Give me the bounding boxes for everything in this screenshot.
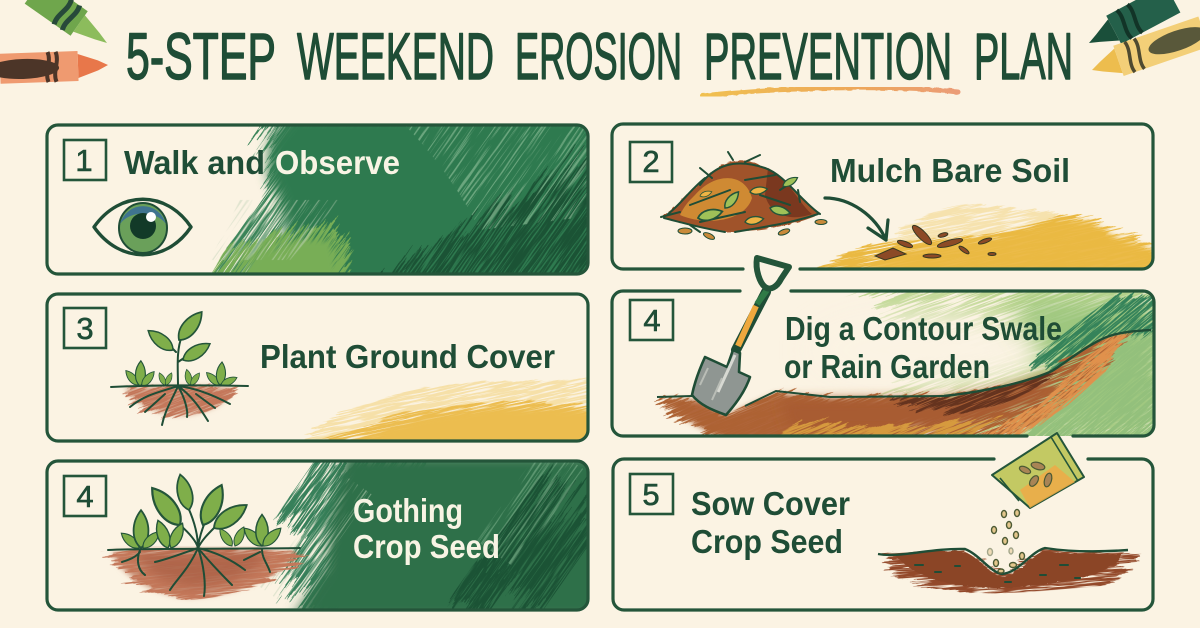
heading: sow cover crop seed: Crop Seed bbox=[691, 523, 843, 560]
title: PLAN bbox=[974, 19, 1073, 93]
heading: gothing crop seed: Crop Seed bbox=[353, 528, 500, 565]
number badge 1 bbox=[64, 140, 106, 180]
heading: walk and observe bbox=[124, 144, 400, 181]
title underline stroke bbox=[703, 88, 958, 96]
title bbox=[126, 19, 1073, 93]
number badge 5 bbox=[630, 474, 673, 514]
icon: yellow crayon bbox=[1087, 16, 1200, 85]
number badge 2 bbox=[630, 142, 672, 182]
panel: step 3 plant ground cover bbox=[45, 292, 590, 443]
panel: step 4 dig a contour swale bbox=[610, 255, 1156, 510]
number badge 4: 4 bbox=[76, 479, 94, 514]
icon: seedling with roots bbox=[111, 307, 248, 454]
number badge 3 bbox=[64, 308, 106, 348]
title: PREVENTION bbox=[704, 19, 952, 93]
heading: walk and observe: Observe bbox=[275, 144, 400, 181]
heading: dig a contour swale or rain garden: or Rain Garden bbox=[784, 348, 990, 385]
number badge 3: 3 bbox=[76, 311, 94, 346]
heading: mulch bare soil: Mulch Bare Soil bbox=[830, 152, 1070, 189]
heading: dig a contour swale or rain garden bbox=[784, 310, 1062, 385]
heading: dig a contour swale or rain garden: Dig a Contour Swale bbox=[785, 310, 1062, 347]
number badge 2: 2 bbox=[642, 144, 660, 179]
title: 5-STEP bbox=[126, 19, 276, 93]
icon: dark green crayon bbox=[1081, 0, 1180, 57]
icon: green crayon bbox=[25, 0, 116, 55]
panel: step 5 sow cover crop seed bbox=[611, 432, 1155, 612]
panel: step 1 walk and observe bbox=[45, 122, 1155, 612]
heading: gothing crop seed bbox=[353, 492, 500, 565]
number badge 4 bbox=[630, 300, 673, 340]
heading: sow cover crop seed: Sow Cover bbox=[691, 485, 850, 522]
icon: soil furrow bbox=[877, 531, 1133, 611]
icon: orange crayon bbox=[0, 50, 109, 84]
icon: seed packet bbox=[992, 433, 1084, 508]
number badge 1: 1 bbox=[75, 143, 93, 178]
mulch scattered on soil bbox=[875, 223, 996, 260]
heading: sow cover crop seed bbox=[691, 485, 850, 560]
number badge 4 bbox=[64, 476, 106, 516]
heading: gothing crop seed: Gothing bbox=[353, 492, 463, 529]
icon: mulch pile bbox=[661, 152, 827, 241]
title: WEEKEND bbox=[297, 19, 494, 93]
number badge 5: 5 bbox=[642, 477, 660, 512]
icon: plants with roots bbox=[103, 473, 305, 620]
panel: step 4 gothing crop seed bbox=[45, 459, 590, 612]
arrow: mulch to soil bbox=[825, 198, 888, 240]
icon: falling seeds bbox=[988, 510, 1024, 573]
number badge 4: 4 bbox=[643, 303, 661, 338]
heading: plant ground cover: Plant Ground Cover bbox=[260, 338, 555, 375]
heading: walk and observe: Walk and bbox=[124, 144, 265, 181]
panel: step 2 mulch bare soil bbox=[610, 122, 1155, 271]
icon: eye bbox=[94, 199, 191, 255]
title: EROSION bbox=[515, 19, 682, 93]
icon: shovel bbox=[692, 258, 789, 415]
